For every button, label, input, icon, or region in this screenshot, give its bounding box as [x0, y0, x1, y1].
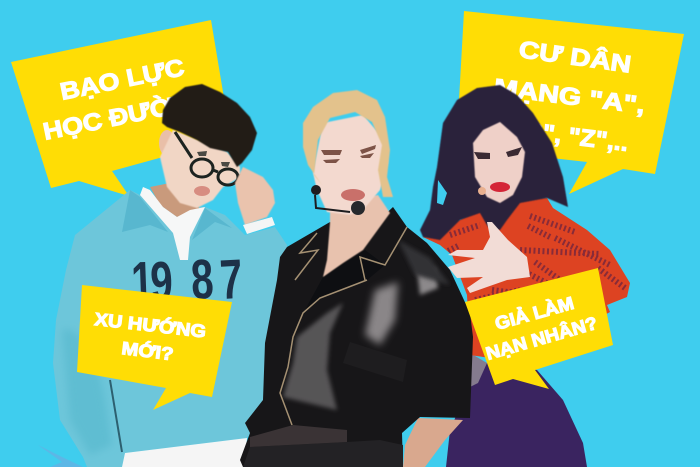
speech bubble: giả làm nạn nhân: [465, 268, 613, 389]
man jacket piping: [280, 280, 367, 425]
boy sweatshirt collar: [122, 190, 232, 240]
man eyebrows and eyes: [321, 145, 376, 163]
speech bubble: cư dân mạng: MẠNG "A",: [492, 74, 646, 119]
woman lips: [490, 182, 510, 192]
speech bubble: cư dân mạng: [459, 11, 684, 194]
man pants: [243, 440, 403, 467]
man collar: [295, 227, 407, 280]
boy ear: [159, 130, 175, 156]
man pocket flap: [343, 342, 407, 382]
boy jersey number: [130, 249, 244, 314]
boy jersey number: 1: [130, 250, 154, 314]
decorative fragment at bottom left: [38, 445, 83, 467]
woman eyes: [474, 147, 522, 159]
speech bubble: xu hướng mới: MỚI?: [121, 337, 175, 364]
boy neck: [150, 180, 200, 217]
boy jersey number: 8: [189, 249, 215, 312]
speech bubble: cư dân mạng: "B", "Z",..: [511, 116, 630, 157]
boy jersey number: 7: [218, 249, 244, 312]
man arm: [403, 418, 463, 467]
speech bubble: bạo lực học đường: BẠO LỰC: [58, 54, 187, 106]
man neck: [323, 195, 390, 277]
woman microphone: [478, 187, 486, 195]
woman skirt: [446, 363, 587, 467]
speech bubble: xu hướng mới: XU HƯỚNG: [94, 308, 207, 342]
boy shirt collar: [140, 187, 205, 260]
person: centre man in black leather: [240, 90, 473, 467]
boy glasses: [175, 132, 245, 185]
person: woman in red top: [420, 85, 630, 467]
speech bubble: xu hướng mới: [77, 285, 232, 410]
boy lips: [194, 186, 210, 196]
woman red top: [423, 198, 630, 358]
man hair: [303, 90, 393, 197]
man face: [313, 115, 388, 215]
man lips: [341, 189, 365, 201]
speech bubble: bạo lực học đường: HỌC ĐƯỜNG: [41, 84, 215, 146]
man chest shirt shadow: [305, 250, 385, 310]
woman hair gap: [437, 180, 447, 205]
boy sleeve seam: [110, 380, 122, 452]
man headset microphone: [311, 185, 365, 215]
boy cuff: [243, 217, 275, 234]
boy hand: [235, 167, 275, 225]
boy eyes: [197, 151, 230, 167]
boy sweatshirt shading: [62, 329, 112, 455]
man jacket highlights: [283, 240, 450, 410]
person: boy in blue sweatshirt: [38, 84, 290, 467]
boy jersey number: 9: [149, 251, 174, 314]
boy sweatshirt: [53, 190, 290, 467]
speech bubble: giả làm nạn nhân: GIẢ LÀM: [492, 292, 576, 334]
speech bubble: bạo lực học đường: [11, 20, 226, 196]
woman hand: [448, 222, 530, 293]
woman top pattern: [440, 216, 625, 300]
speech bubble: cư dân mạng: CƯ DÂN: [517, 35, 633, 79]
man belt: [250, 425, 347, 447]
speech bubble: giả làm nạn nhân: NẠN NHÂN?: [483, 312, 600, 364]
boy hair: [162, 84, 257, 167]
boy face: [160, 130, 240, 208]
boy shirt hem: [122, 438, 247, 467]
man jacket: [240, 207, 473, 467]
woman hair: [420, 85, 568, 240]
woman face: [473, 122, 525, 203]
woman belt: [470, 353, 487, 387]
